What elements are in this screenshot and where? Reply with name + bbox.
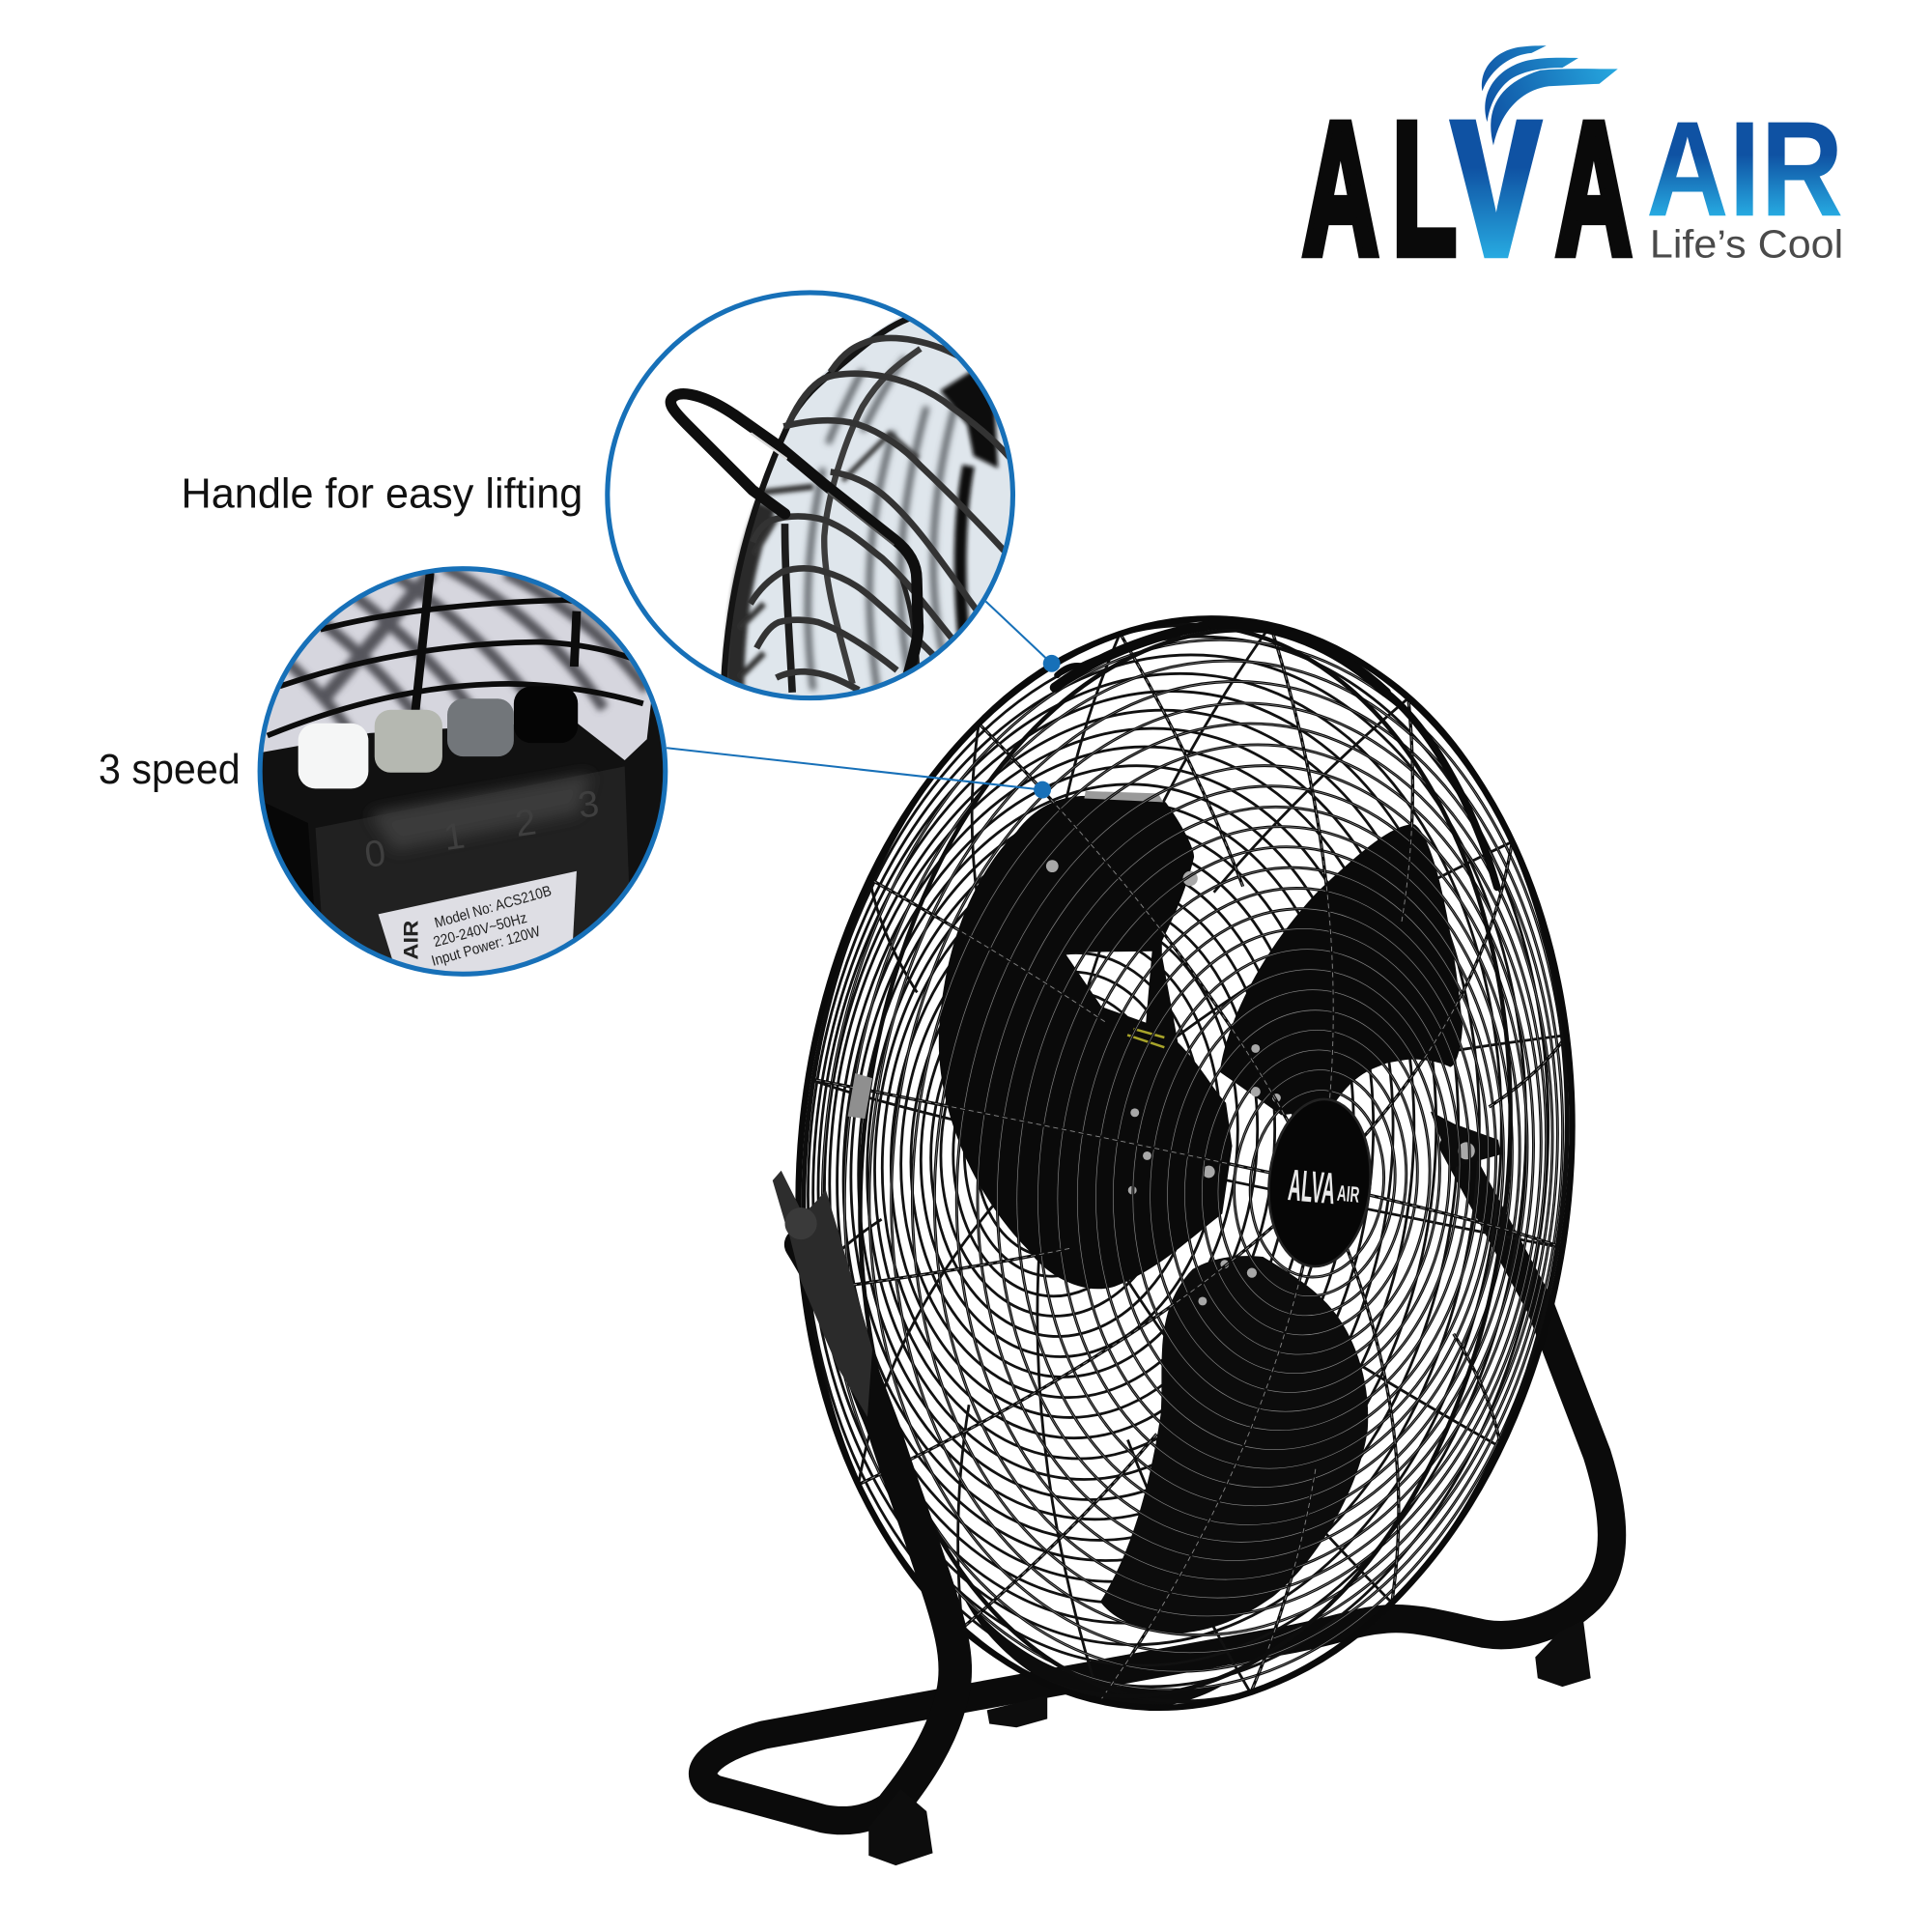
logo wordmark: ALVA xyxy=(1303,85,1632,294)
inset circle: handle detail xyxy=(608,293,1023,708)
fan motor switch top xyxy=(1084,791,1163,802)
fan front grille xyxy=(750,582,1621,1744)
inset button numbers: 2 xyxy=(513,801,539,845)
inset background xyxy=(263,571,651,760)
inset dark bars and blob xyxy=(734,370,998,690)
inset blurred grey bars xyxy=(808,357,955,690)
inset speed buttons xyxy=(298,686,578,788)
inset blurred shadow stripes xyxy=(288,571,647,724)
fan product illustration xyxy=(703,582,1621,1865)
logo wordmark: AIR: AIR xyxy=(1646,93,1843,244)
fan rivets xyxy=(1046,860,1281,1305)
inset rim wires xyxy=(724,317,921,702)
logo: Alva Air xyxy=(1303,45,1843,294)
inset handle wire xyxy=(670,394,918,675)
inset switch box xyxy=(263,703,663,913)
inset product label xyxy=(379,871,577,972)
fan bottom rim crescent xyxy=(958,1587,1222,1709)
fan motor wires xyxy=(1127,1029,1164,1047)
fan rim clip xyxy=(848,1073,872,1119)
inset product label: 220-240V~50Hz xyxy=(432,910,528,951)
fan hub with logo xyxy=(1262,1095,1378,1270)
fan hub with logo: AIR xyxy=(1336,1180,1361,1208)
label: handle: Handle for easy lifting xyxy=(182,471,582,518)
logo wordmark: ALVA: V xyxy=(1453,85,1539,294)
inset button numbers: 0 xyxy=(362,832,388,876)
fan rear knob xyxy=(1431,1112,1501,1168)
fan rear grille xyxy=(752,585,1619,1741)
inset background xyxy=(743,317,1010,696)
logo wordmark: ALVA: A xyxy=(1556,85,1632,294)
inset switch box front face xyxy=(316,766,631,974)
fan feet xyxy=(868,1620,1591,1865)
inset product label: Input Power: 120W xyxy=(430,923,543,970)
inset grille wires xyxy=(268,573,643,735)
inset button numbers xyxy=(366,791,598,867)
fan motor and rear blade xyxy=(939,796,1233,1289)
logo icon: air swoosh feathers xyxy=(1482,45,1618,146)
inset product label: Model No: ACS210B xyxy=(433,883,554,931)
connector: speed callout xyxy=(667,748,1051,799)
label: 3 speed: 3 speed xyxy=(99,747,241,793)
inset grille arcs xyxy=(751,338,1010,690)
inset circle: speed switch detail xyxy=(252,560,678,985)
fan blade: lower xyxy=(1100,1256,1368,1634)
inset button numbers: 1 xyxy=(441,814,468,859)
connector: handle callout xyxy=(985,601,1061,672)
fan stand: left arm xyxy=(773,1171,955,1805)
fan blade: upper right xyxy=(1220,824,1463,1115)
inset button numbers: 3 xyxy=(576,782,602,827)
inset product label: AIR xyxy=(398,920,422,960)
fan hub with logo: ALVA xyxy=(1287,1159,1337,1213)
logo tagline: Life’s Cool xyxy=(1650,222,1843,267)
fan rim: thick top band xyxy=(1055,622,1497,887)
logo wordmark: ALVA: AL xyxy=(1303,85,1457,294)
fan stand: right arm and base xyxy=(703,1146,1612,1821)
